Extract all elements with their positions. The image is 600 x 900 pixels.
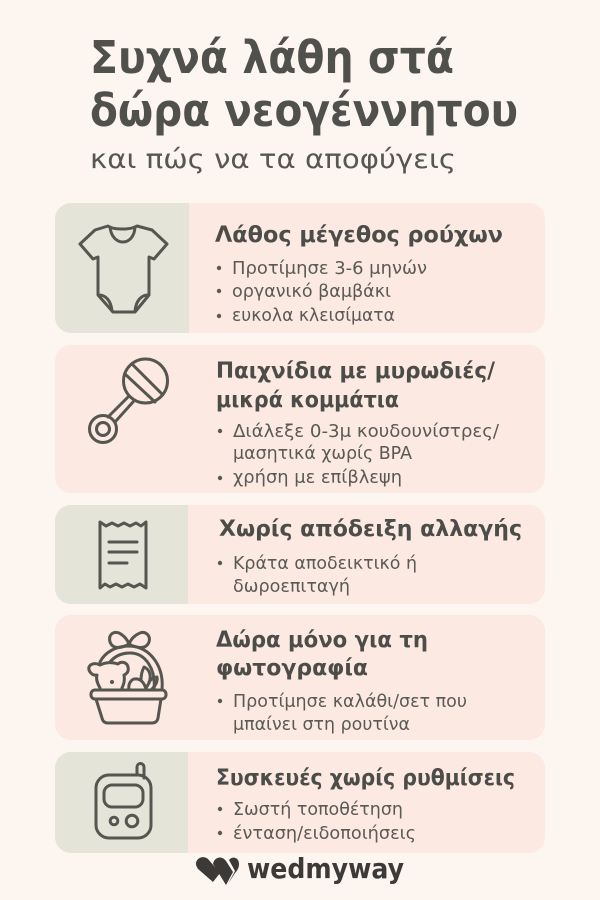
panel: gifts only for the photo bbox=[55, 615, 545, 740]
title bbox=[90, 31, 518, 137]
wordmark: wedmyway bbox=[247, 852, 404, 885]
icon: baby monitor bbox=[96, 764, 151, 838]
heading: Παιχνίδια με μυρωδιές/ bbox=[216, 359, 496, 384]
heading: Λάθος μέγεθος ρούχων bbox=[215, 223, 503, 248]
bullet list bbox=[217, 258, 427, 326]
bullet list bbox=[218, 799, 416, 844]
subtitle: και πώς να τα αποφύγεις bbox=[90, 144, 456, 175]
bullet list bbox=[218, 553, 417, 597]
icon: rattle bbox=[90, 359, 168, 442]
heading bbox=[216, 628, 428, 681]
bullet list bbox=[218, 691, 467, 735]
bullet list: Προτίμησε καλάθι/σετ που bbox=[233, 691, 467, 712]
bullet list: μασητικά χωρίς BPA bbox=[233, 443, 413, 464]
heading: Δώρα μόνο για τη bbox=[216, 628, 428, 653]
icon: baby bodysuit bbox=[80, 226, 167, 312]
bullet list: μπαίνει στη ρουτίνα bbox=[233, 714, 410, 735]
heading bbox=[216, 359, 496, 413]
title: δώρα νεογέννητου bbox=[90, 84, 518, 137]
heading: μικρά κομμάτια bbox=[216, 388, 399, 413]
bullet list: Διάλεξε 0-3μ κουδουνίστρες/ bbox=[233, 421, 500, 442]
bullet list bbox=[218, 421, 500, 488]
icon: receipt bbox=[100, 522, 146, 588]
logo: wedmyway bbox=[196, 852, 404, 885]
bullet list: Προτίμησε 3-6 μηνών bbox=[232, 258, 427, 279]
heading: Συσκευές χωρίς ρυθμίσεις bbox=[216, 766, 515, 791]
heading: φωτογραφία bbox=[216, 656, 368, 681]
heading: Χωρίς απόδειξη αλλαγής bbox=[219, 517, 522, 542]
bullet list: δωροεπιταγή bbox=[233, 576, 350, 597]
bullet list: ένταση/ειδοποιήσεις bbox=[233, 823, 416, 844]
bullet list: χρήση με επίβλεψη bbox=[233, 467, 402, 488]
bullet list: Σωστή τοποθέτηση bbox=[233, 799, 403, 820]
panel: toys with scents and small parts bbox=[55, 345, 545, 493]
panel: wrong clothes size bbox=[55, 203, 545, 333]
panel: no exchange receipt bbox=[55, 505, 545, 604]
title: Συχνά λάθη στά bbox=[90, 31, 454, 84]
panel: devices without settings bbox=[55, 752, 545, 853]
bullet list: ευκολα κλεισίματα bbox=[232, 305, 395, 326]
icon: double heart bbox=[196, 857, 239, 885]
bullet list: οργανικό βαμβάκι bbox=[232, 281, 391, 302]
bullet list: Κράτα αποδεικτικό ή bbox=[233, 553, 417, 574]
icon: gift basket with teddy bbox=[89, 632, 166, 723]
